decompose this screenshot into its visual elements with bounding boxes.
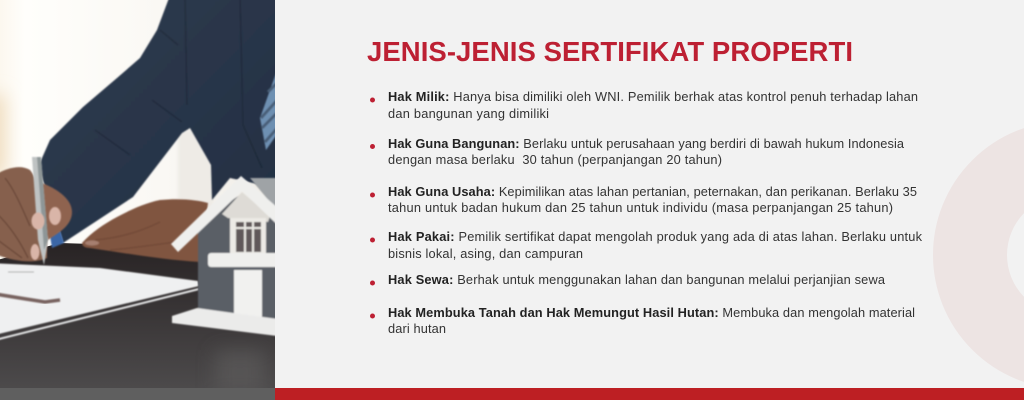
house door — [234, 270, 262, 320]
list item: Hak Guna Usaha — [370, 184, 917, 215]
house gable — [222, 192, 270, 222]
shirt cuff — [50, 230, 64, 248]
footer bar: grey — [0, 388, 275, 400]
text — [388, 229, 923, 261]
bullet — [370, 192, 375, 198]
list item: Hak Sewa — [370, 272, 886, 287]
fingernails — [30, 207, 61, 260]
house base — [172, 308, 285, 337]
text — [388, 305, 915, 336]
pen — [32, 157, 48, 265]
text: Hak Sewa: Berhak untuk menggunakan lahan dan bangunan melalui perjanjian sewa — [388, 272, 886, 287]
text: Hak Guna Bangunan: Berlaku untuk perusahaan yang berdiri di bawah hukum Indonesia — [388, 136, 905, 151]
text — [388, 184, 917, 215]
list item: Hak Guna Bangunan — [370, 136, 905, 167]
palm and fingers — [0, 167, 47, 261]
bullet — [370, 238, 375, 242]
text: bisnis lokal, asing, dan campuran — [388, 246, 583, 261]
text: Hak Guna Usaha: Kepimilikan atas lahan pertanian, peternakan, dan perikanan. Berlaku 35 — [388, 184, 917, 199]
list item: Hak Membuka Tanah dan Hak Memungut Hasil Hutan — [370, 305, 915, 336]
bullet — [370, 314, 375, 318]
bullet — [370, 280, 375, 286]
list item: Hak Milik — [370, 89, 918, 121]
text: Hak Milik: Hanya bisa dimiliki oleh WNI. Pemilik berhak atas kontrol penuh terhadap lahan — [388, 89, 918, 104]
decorative ring — [970, 158, 1024, 352]
list item: Hak Pakai — [370, 229, 923, 261]
text: dan bangunan yang dimiliki — [388, 106, 549, 121]
text: dengan masa berlaku 30 tahun (perpanjangan 20 tahun) — [388, 152, 722, 167]
left hand — [0, 167, 72, 261]
paper document — [0, 263, 199, 340]
house roof back — [250, 177, 275, 206]
text: Hak Pakai: Pemilik sertifikat dapat mengolah produk yang ada di atas lahan. Berlaku untuk — [388, 229, 923, 244]
house window — [230, 218, 266, 255]
thumb — [38, 183, 72, 240]
text: Hak Membuka Tanah dan Hak Memungut Hasil Hutan: Membuka dan mengolah material — [388, 305, 915, 320]
table — [0, 243, 285, 395]
table reflection — [216, 348, 264, 388]
right hand — [82, 199, 208, 262]
tie — [259, 74, 275, 150]
house wall — [197, 196, 275, 320]
text: tahun untuk badan hukum dan 25 tahun untuk individu (masa perpanjangan 25 tahun) — [388, 200, 893, 215]
footer bar: red — [275, 388, 1024, 400]
text — [388, 136, 905, 167]
house roof — [171, 176, 285, 252]
photo background — [0, 0, 258, 259]
title: JENIS-JENIS SERTIFIKAT PROPERTI — [367, 36, 853, 67]
text — [388, 89, 918, 121]
photo: signing a property certificate — [0, 0, 285, 395]
key on paper — [0, 294, 60, 302]
suit — [38, 0, 285, 243]
text: dari hutan — [388, 321, 446, 336]
bullet — [370, 144, 375, 149]
house ledge — [208, 253, 285, 267]
model house — [171, 176, 285, 337]
bullet — [370, 98, 375, 102]
